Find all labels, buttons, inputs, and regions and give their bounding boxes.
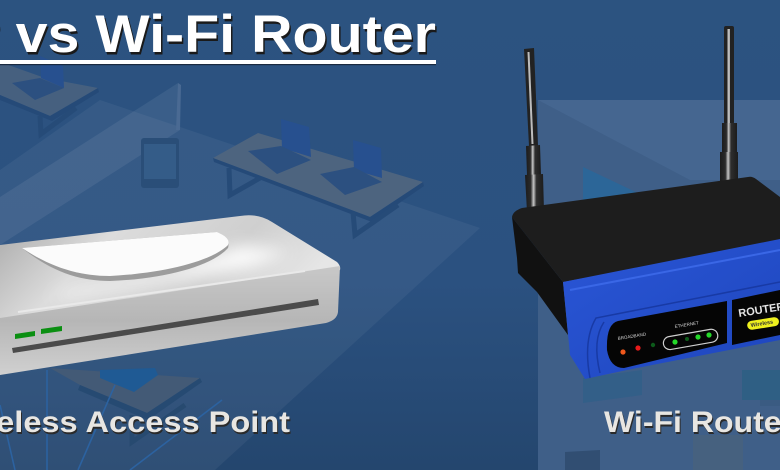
monitor [742,370,780,406]
slot [12,299,319,353]
right antenna [720,26,738,184]
status LEDs [15,326,62,339]
label: ethernet: ETHERNET [674,320,699,329]
window: upper [583,167,640,240]
wireless access point device [0,215,340,375]
window: lower [583,370,642,403]
front panel: indicators [607,301,727,368]
label: wi-fi router: Wi-Fi Router [604,406,780,439]
broadband LEDs [620,343,655,355]
router top [512,177,780,282]
device body: front [0,266,340,375]
tablet [141,138,179,188]
left office scene [0,56,480,470]
highlight on top surface [50,245,290,300]
desk: lower [50,368,202,442]
front panel: brand [732,290,780,345]
router blue front [563,239,780,379]
desk: upper left [0,56,99,134]
left antenna [524,48,544,212]
wi-fi router device [512,177,780,379]
label: wi-fi router: Wi-Fi Router [605,408,780,441]
ethernet LEDs [662,328,719,351]
right building scene [538,100,780,470]
device body: top [0,215,340,320]
label: broadband: BROADBAND [617,331,647,341]
router side [512,217,568,335]
antenna dome [22,232,229,281]
desk: centre [213,119,424,235]
wireless badge: Wireless [750,320,774,329]
network lines [0,370,222,470]
